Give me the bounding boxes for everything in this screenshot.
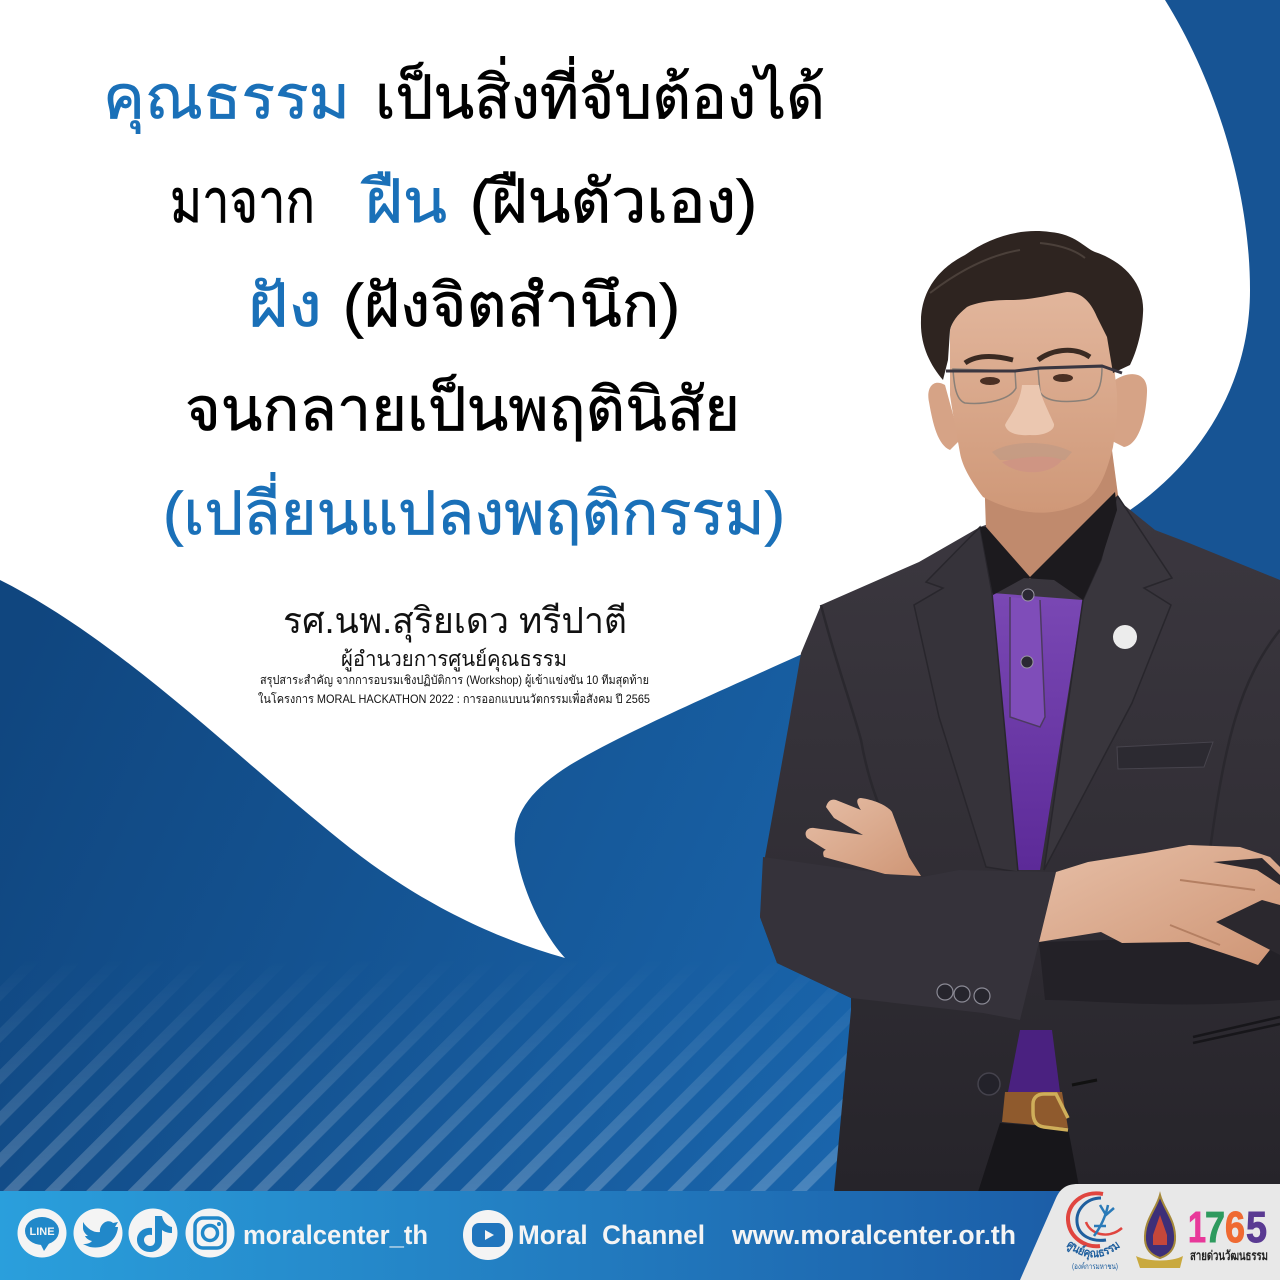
headline line 3: (ฝังจิตสำนึก) <box>343 272 680 339</box>
trousers <box>978 1123 1080 1192</box>
headline line 1 <box>103 56 825 134</box>
headline <box>103 56 825 547</box>
shirt buttons <box>1021 589 1034 668</box>
channel name: Moral Channel <box>518 1220 705 1250</box>
headline line 5: (เปลี่ยนแปลงพฤติกรรม) <box>163 472 785 547</box>
icon: tiktok <box>128 1208 178 1258</box>
jacket lower button <box>978 1073 1000 1095</box>
moustache shadow <box>992 443 1072 460</box>
shirt placket <box>1010 597 1045 727</box>
speaker name: รศ.นพ.สุริยเดว ทรีปาตี <box>283 600 627 643</box>
headline line 2: ฝืน <box>360 168 447 235</box>
headline line 2: มาจาก <box>170 168 315 235</box>
breast pocket <box>1117 742 1213 769</box>
website: www.moralcenter.or.th <box>731 1220 1016 1250</box>
logo: 1765: 5 <box>1246 1203 1267 1252</box>
logo: ministry emblem <box>1136 1195 1183 1268</box>
nose <box>1005 385 1054 435</box>
headline line 1: เป็นสิ่งที่จับต้องได้ <box>375 56 825 131</box>
speaker credit <box>258 600 650 706</box>
logo: moral center: ศูนย์คุณธรรม <box>1066 1242 1120 1260</box>
upper right background <box>1100 0 1280 720</box>
sleeve buttons <box>937 984 990 1004</box>
right lapel <box>1044 495 1172 870</box>
purple shirt <box>992 593 1083 870</box>
speech bubble <box>0 0 1250 958</box>
left lapel <box>914 527 1018 872</box>
neck <box>984 450 1118 579</box>
headline line 3: ฝัง <box>248 272 322 339</box>
jacket body <box>760 480 1280 1192</box>
icon: line <box>18 1208 66 1258</box>
tucked hand <box>806 798 921 876</box>
speaker title: ผู้อำนวยการศูนย์คุณธรรม <box>341 647 567 672</box>
buttonhole <box>1072 1080 1097 1085</box>
logo: 1765: 1 <box>1188 1203 1206 1252</box>
dark shadow beneath right hand <box>1039 935 1280 1004</box>
ear left <box>928 383 960 450</box>
lower purple shirt <box>1008 1030 1060 1092</box>
belt <box>1002 1092 1068 1130</box>
black collar <box>980 492 1117 600</box>
eyebrows <box>965 350 1090 363</box>
footer bar <box>0 1191 1280 1280</box>
ear right <box>1110 374 1147 447</box>
icon: line: LINE <box>29 1226 55 1238</box>
source note line 2: ในโครงการ MORAL HACKATHON 2022 : การออกแบบนวัตกรรมเพื่อสังคม ปี 2565 <box>258 690 650 706</box>
diagonal stripes <box>0 996 851 1191</box>
hair <box>921 231 1143 380</box>
headline line 2 <box>170 168 757 235</box>
hair highlight <box>930 243 1085 293</box>
headline line 4: จนกลายเป็นพฤตินิสัย <box>185 374 740 443</box>
icon: instagram <box>186 1208 234 1258</box>
arm fold lines <box>821 605 1280 850</box>
face <box>950 266 1117 513</box>
lower pocket <box>1193 1017 1280 1043</box>
portrait of speaker <box>760 231 1280 1192</box>
source note line 1: สรุปสาระสำคัญ จากการอบรมเชิงปฏิบัติการ (Workshop) ผู้เข้าแข่งขัน 10 ทีมสุดท้าย <box>260 673 649 688</box>
logo: 1765: 6 <box>1225 1203 1245 1252</box>
left sleeve <box>760 857 1056 1020</box>
mouth <box>1002 457 1062 472</box>
logo: moral center: (องค์การมหาชน) <box>1072 1261 1118 1271</box>
lapel pin <box>1113 625 1137 649</box>
finger lines <box>1170 880 1255 945</box>
eyes <box>980 374 1073 385</box>
gaps between fingers <box>1213 858 1280 955</box>
right hand <box>1039 845 1280 965</box>
glasses <box>946 366 1122 403</box>
logo: 1765: 7 <box>1205 1203 1225 1252</box>
logo panel <box>1020 1184 1280 1280</box>
logo: moral center <box>1066 1191 1123 1271</box>
headline line 2: (ฝืนตัวเอง) <box>470 168 757 235</box>
logo: 1765 <box>1188 1203 1268 1263</box>
icon: twitter <box>74 1208 122 1258</box>
headline line 1: คุณธรรม <box>103 64 350 134</box>
social handle: moralcenter_th <box>243 1220 428 1250</box>
icon: youtube <box>463 1210 513 1260</box>
